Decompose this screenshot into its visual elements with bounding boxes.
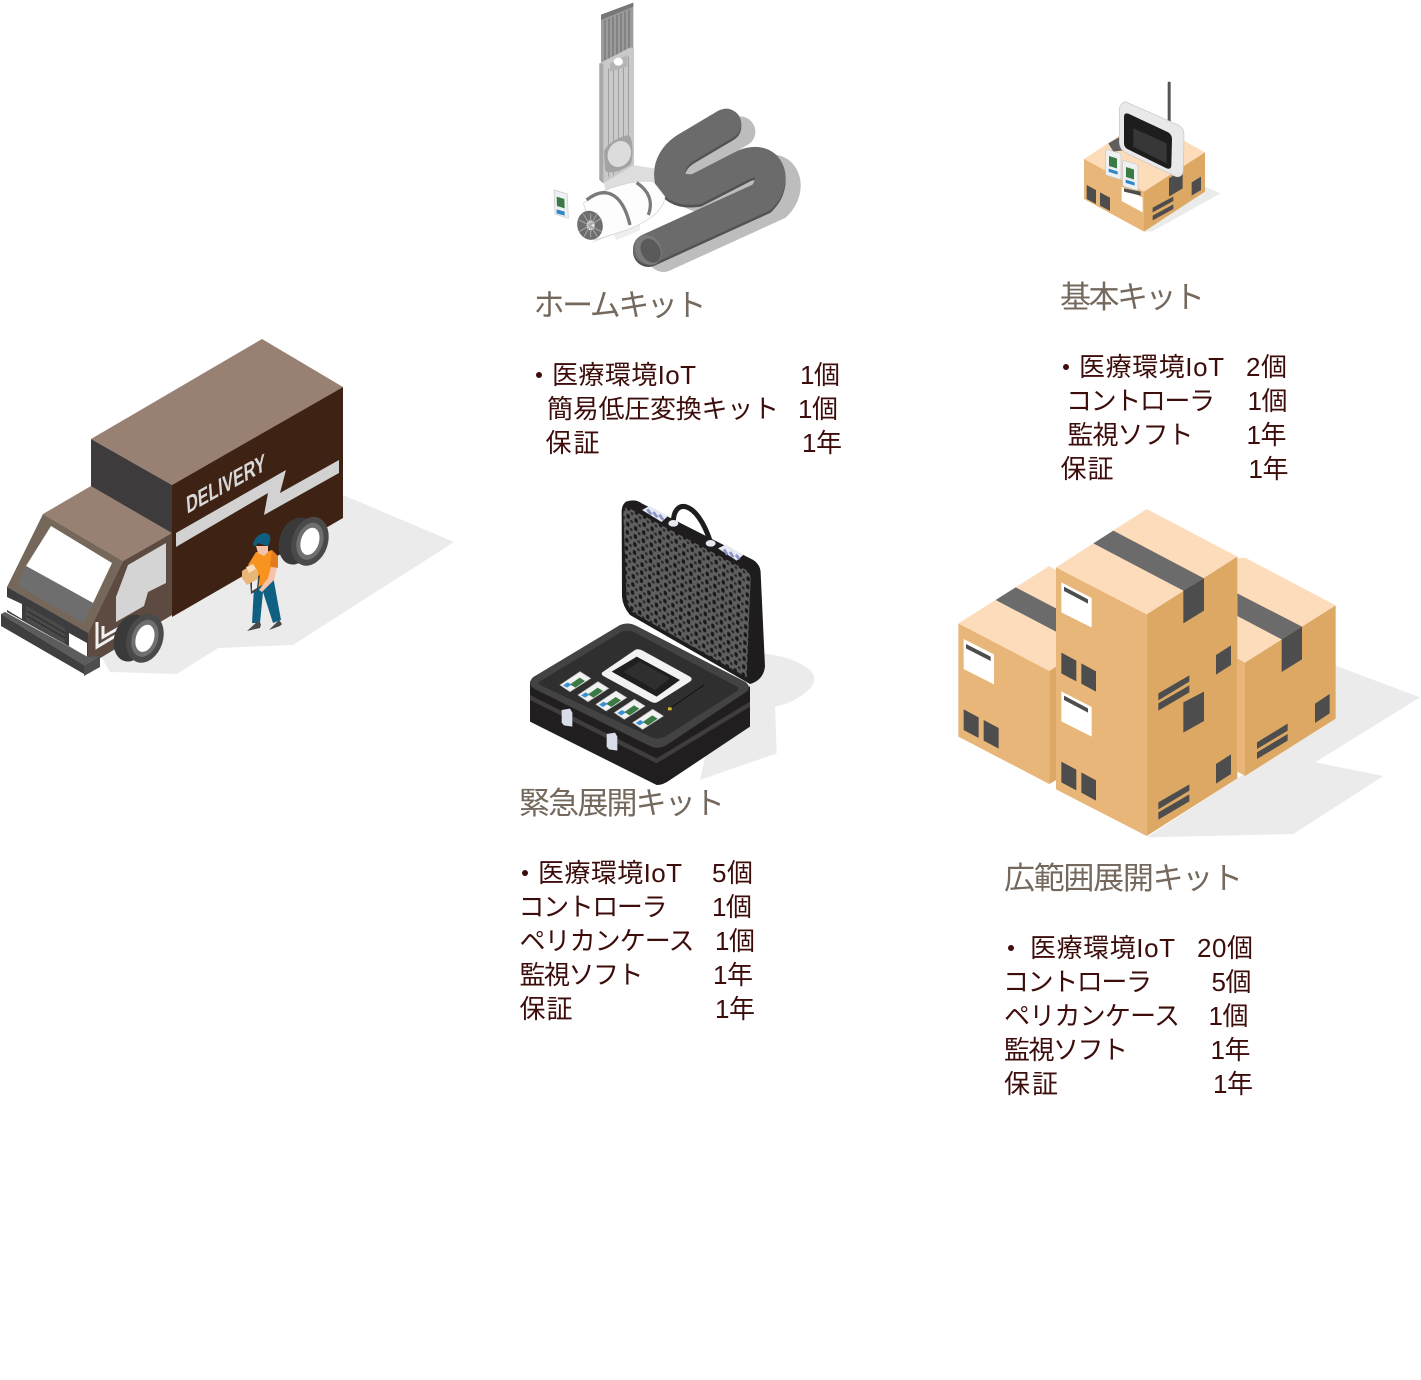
- delivery lettering: DELIVERY: [185, 449, 266, 520]
- delivery worker: [242, 533, 282, 631]
- list: 保証: [546, 428, 600, 458]
- list: 1年: [1213, 1069, 1253, 1099]
- cab: [1, 486, 172, 676]
- list: 20個: [1197, 933, 1253, 963]
- sensor: [554, 190, 568, 218]
- heading: 広範囲展開キット: [1004, 861, 1243, 896]
- list: 1個: [1208, 1001, 1248, 1031]
- left box: [958, 566, 1056, 784]
- list: 保証: [1060, 454, 1114, 484]
- cargo box: [91, 339, 343, 617]
- list: 1個: [1248, 386, 1288, 416]
- list: 医療環境IoT: [552, 360, 696, 390]
- panel: emergency kit: [518, 500, 814, 1024]
- list: 1個: [715, 926, 755, 956]
- list: 2個: [1246, 352, 1287, 382]
- duct: [630, 124, 770, 270]
- list: 簡易低圧変換キット: [547, 394, 779, 424]
- probe: [668, 685, 704, 710]
- wall panel: [599, 3, 635, 183]
- illustration: box with controller: [1084, 82, 1221, 232]
- antenna: [1168, 82, 1171, 125]
- truck illustration: [1, 339, 454, 676]
- bumper: [1, 612, 100, 676]
- duct shadow: [663, 132, 785, 257]
- panel: wide-area kit: [958, 509, 1420, 1099]
- list: 1個: [800, 360, 840, 390]
- illustration: stacked boxes: [958, 509, 1420, 837]
- list: 1年: [1246, 420, 1286, 450]
- front wheel: [108, 605, 170, 671]
- list: [536, 360, 842, 458]
- list: [1060, 352, 1288, 484]
- list: 医療環境IoT: [538, 858, 682, 888]
- case base: [530, 624, 750, 785]
- truck shadow: [100, 495, 454, 674]
- fan body: [574, 181, 665, 243]
- list: コントローラ: [518, 892, 668, 922]
- case lid: [622, 500, 765, 684]
- illustration: duct and fan: [554, 3, 785, 270]
- list: 5個: [712, 858, 753, 888]
- heading: 基本キット: [1060, 280, 1205, 315]
- list: 医療環境IoT: [1079, 352, 1224, 382]
- list: 1年: [713, 960, 753, 990]
- list: 監視ソフト: [1004, 1035, 1128, 1065]
- list: 医療環境IoT: [1030, 933, 1175, 963]
- list: 1年: [1248, 454, 1288, 484]
- list: 1個: [712, 892, 752, 922]
- list: ペリカンケース: [520, 926, 694, 956]
- list: 5個: [1212, 967, 1252, 997]
- heading: ホームキット: [534, 288, 706, 323]
- list: [1003, 933, 1253, 1099]
- list: 監視ソフト: [520, 960, 644, 990]
- screen: [602, 649, 692, 703]
- illustration: open case: [530, 500, 814, 785]
- list: 1個: [798, 394, 838, 424]
- list: 1年: [1210, 1035, 1250, 1065]
- list: [518, 858, 755, 1024]
- list: 監視ソフト: [1068, 420, 1194, 450]
- controller: [1119, 102, 1184, 177]
- list: 1年: [802, 428, 842, 458]
- list: 1年: [715, 994, 755, 1024]
- panel: basic kit: [1060, 82, 1288, 484]
- list: ペリカンケース: [1004, 1001, 1180, 1031]
- right box: [1237, 558, 1336, 776]
- sensors row: [560, 672, 591, 692]
- list: 保証: [520, 994, 572, 1024]
- heading: 緊急展開キット: [519, 786, 725, 821]
- panel: home kit: [534, 3, 842, 458]
- rear wheel: [273, 508, 335, 574]
- centre tall box: [1056, 509, 1237, 836]
- list: コントローラ: [1003, 967, 1152, 997]
- list: 保証: [1004, 1069, 1058, 1099]
- list: コントローラ: [1066, 386, 1215, 416]
